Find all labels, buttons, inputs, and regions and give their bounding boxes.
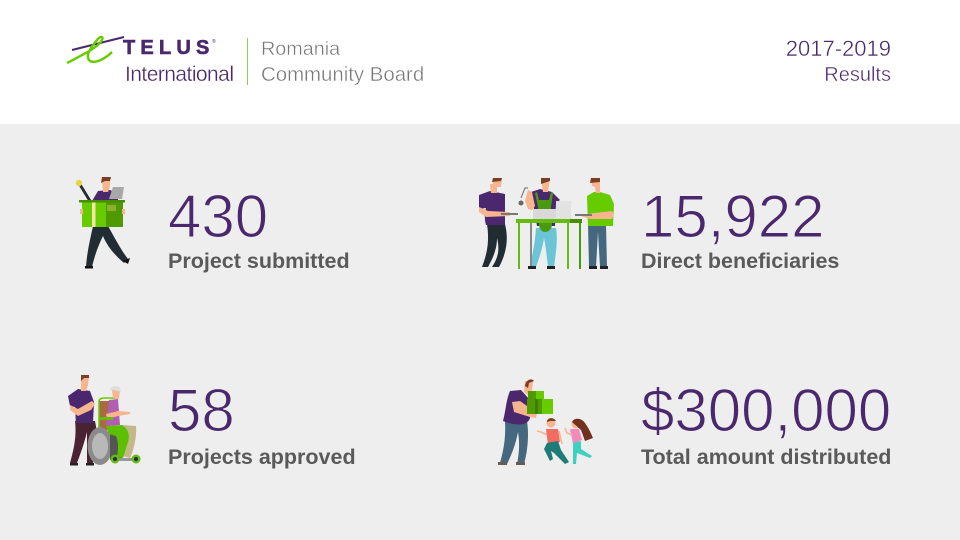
board title: Romania xyxy=(261,38,340,60)
International wordmark: International xyxy=(125,63,233,86)
registered mark: ® xyxy=(212,39,216,45)
board title xyxy=(261,38,424,86)
stat: projects approved xyxy=(68,375,356,469)
label: Projects approved xyxy=(168,445,356,469)
period: 2017-2019 xyxy=(786,36,891,61)
stat: direct beneficiaries xyxy=(479,178,839,273)
logo mark xyxy=(66,36,124,64)
label: Total amount distributed xyxy=(641,445,891,469)
number: 58 xyxy=(168,377,235,444)
number: 430 xyxy=(168,183,268,250)
stat: projects submitted xyxy=(76,177,350,273)
icon: man carrying box xyxy=(76,177,130,268)
stat: total amount distributed xyxy=(498,377,891,469)
icon: three people serving food xyxy=(479,178,614,269)
period: Results xyxy=(824,64,891,86)
label: Direct beneficiaries xyxy=(641,249,839,273)
label: Project submitted xyxy=(168,249,350,273)
number: $300,000 xyxy=(641,377,891,444)
divider xyxy=(247,38,248,85)
number: 15,922 xyxy=(641,183,825,250)
logo: TELUS International xyxy=(66,36,233,86)
icon: man pushing woman in wheelchair xyxy=(68,375,140,466)
period xyxy=(786,36,891,86)
icon: man handing gifts to children xyxy=(498,379,593,465)
TELUS wordmark: TELUS xyxy=(123,37,215,59)
board title: Community Board xyxy=(261,64,424,86)
header band xyxy=(0,0,960,124)
